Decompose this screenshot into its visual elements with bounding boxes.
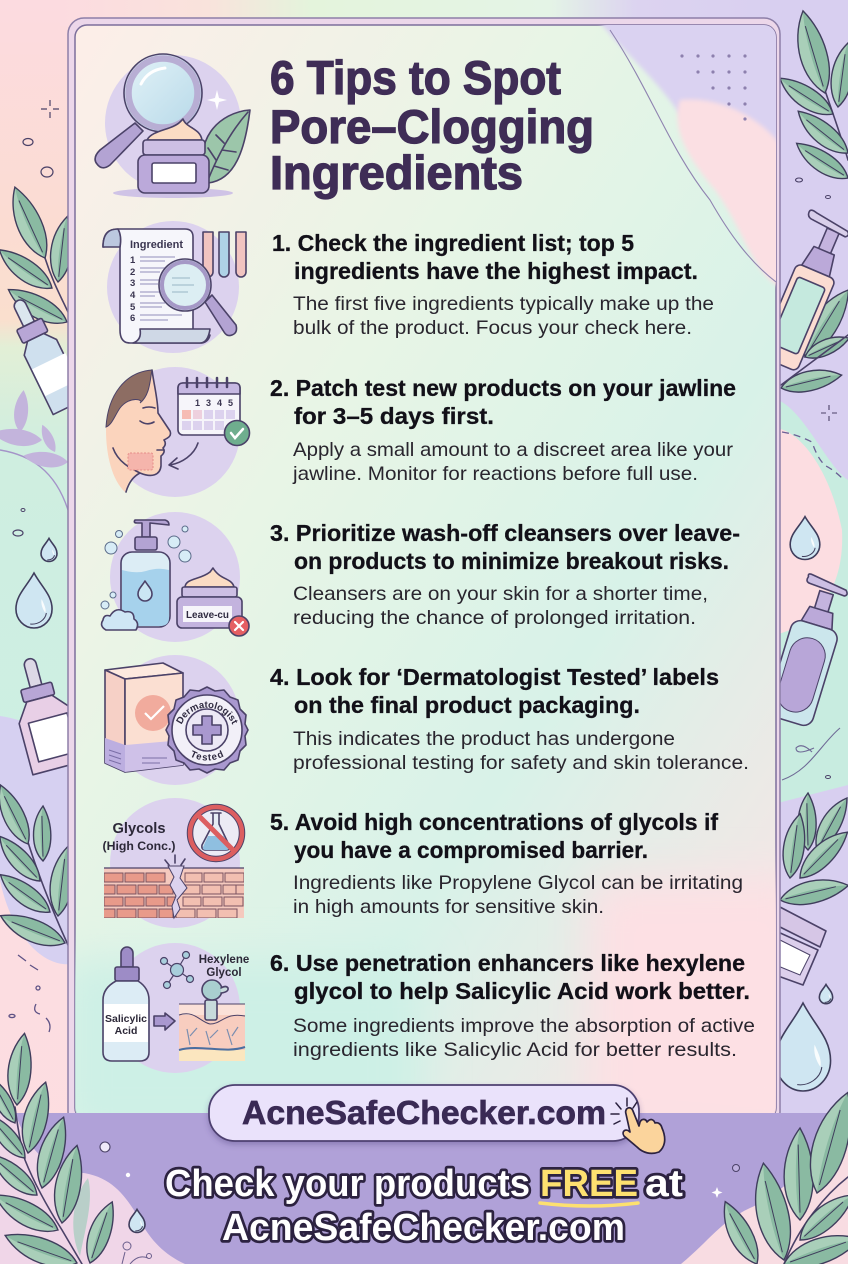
footer call to action: at [645,1163,683,1205]
tip 4 text: This indicates the product has undergone [293,728,675,750]
tip 1 icon: ingredient list and magnifier [103,221,246,353]
title [270,51,594,199]
tip 6 icon: salicylic acid and hexylene glycol: Salicylic [105,1013,147,1025]
website button [209,1085,639,1141]
footer accents [100,1142,740,1264]
tip 6 icon: salicylic acid and hexylene glycol: Glycol [206,967,242,979]
left droplets [13,100,59,628]
tip 1 icon: ingredient list and magnifier: Ingredient [130,239,183,251]
tip 1 icon: ingredient list and magnifier: 1 [130,255,136,266]
right jar [778,906,826,985]
icon: clicking hand [611,1098,665,1153]
tip 1 icon: ingredient list and magnifier: 3 [130,278,135,289]
footer call to action: Check your products [165,1163,530,1205]
tip 5 text [270,809,743,918]
tip 3 text: on products to minimize breakout risks. [294,548,729,574]
tip 6 text: Some ingredients improve the absorption of active [293,1015,755,1037]
tip 5 icon: glycols and cracked barrier: Glycols [112,821,166,837]
website button: AcneSafeChecker.com [242,1094,606,1131]
tip 6 text: glycol to help Salicylic Acid work better. [294,978,750,1004]
right droplets [775,984,833,1091]
tip 6 icon: salicylic acid and hexylene glycol: Acid [115,1025,137,1037]
tip 4 text: 4. Look for ‘Dermatologist Tested’ labels [270,664,719,690]
title: 6 Tips to Spot [270,51,561,104]
tip 1 text [272,230,714,339]
tip 4 icon: box and dermatologist seal: Tested [192,750,224,760]
tip 2 text: for 3–5 days first. [294,403,494,429]
tip 1 icon: ingredient list and magnifier: 6 [130,313,135,324]
tip 3 icon: cleanser and leave-on jar: Leave-cu [186,610,229,621]
tip 1 text: The first five ingredients typically make up the [293,293,714,315]
tip 4 text: professional testing for safety and skin tolerance. [293,752,749,774]
hero icon: magnifier over cream jar [95,54,250,198]
tip 6 icon: salicylic acid and hexylene glycol [103,943,249,1073]
right lower leaf branch [777,793,848,910]
tip 1 text: 1. Check the ingredient list; top 5 [272,230,634,256]
tip 1 icon: ingredient list and magnifier: 4 [130,290,136,301]
tip 5 text: Ingredients like Propylene Glycol can be irritating [293,872,743,894]
tip 5 text: you have a compromised barrier. [294,837,648,863]
left dotted accents [9,955,50,1032]
tip 2 text: Apply a small amount to a discreet area like your [293,439,734,461]
tip 5 icon: glycols and cracked barrier: (High Conc.) [102,839,176,853]
footer band [0,1113,848,1264]
left pink dropper bottle [4,651,87,775]
tip 2 text: 2. Patch test new products on your jawline [270,375,736,401]
right pump bottle peach [750,209,848,372]
tip 6 text: ingredients like Salicylic Acid for better results. [293,1039,737,1061]
title: Ingredients [270,146,523,199]
right top leaf branch [774,8,848,187]
tip 5 icon: glycols and cracked barrier [103,798,246,928]
footer left leaf branch [0,1032,121,1264]
footer call to action [165,1163,683,1249]
footer call to action: AcneSafeChecker.com [222,1207,625,1249]
tip 4 text: on the final product packaging. [294,692,640,718]
tip 4 text [270,664,749,774]
tip 6 text [270,950,755,1061]
left lavender branch [0,390,69,510]
tip 3 text [270,520,740,629]
tip 1 text: ingredients have the highest impact. [294,258,698,284]
left top leaf branch [0,183,77,332]
tip 2 text: jawline. Monitor for reactions before full use. [292,463,698,485]
tip 1 text: bulk of the product. Focus your check here. [293,317,692,339]
tip 3 icon: cleanser and leave-on jar [101,512,249,642]
tip 3 text: 3. Prioritize wash-off cleansers over leave- [270,520,740,546]
tip 1 icon: ingredient list and magnifier: 2 [130,267,135,278]
tip 2 icon: face and calendar [106,367,250,497]
tip 4 icon: box and dermatologist seal [104,655,249,785]
tip 6 icon: salicylic acid and hexylene glycol: Hexylene [199,954,249,966]
tip 6 text: 6. Use penetration enhancers like hexylene [270,950,745,976]
tip 5 text: in high amounts for sensitive skin. [293,896,604,918]
tip 3 text: reducing the chance of prolonged irritation. [293,607,696,629]
tip 4 icon: box and dermatologist seal: Dermatologist [176,701,238,725]
right small accents [782,178,844,780]
tip 3 text: Cleansers are on your skin for a shorter time, [293,583,708,605]
footer right leaf branch [714,1087,848,1264]
right pump bottle mint [764,573,848,728]
tip 2 text [270,375,736,485]
tip 2 icon: face and calendar: 1 3 4 5 [195,398,233,408]
right leaves under pump [779,282,848,397]
tip 5 text: 5. Avoid high concentrations of glycols if [270,809,718,835]
left lower leaf branch [0,781,78,954]
footer call to action: FREE [540,1163,638,1205]
main panel [60,10,810,1140]
left dropper bottle [1,292,87,415]
title: Pore–Clogging [270,100,594,153]
tip 1 icon: ingredient list and magnifier: 5 [130,302,136,313]
